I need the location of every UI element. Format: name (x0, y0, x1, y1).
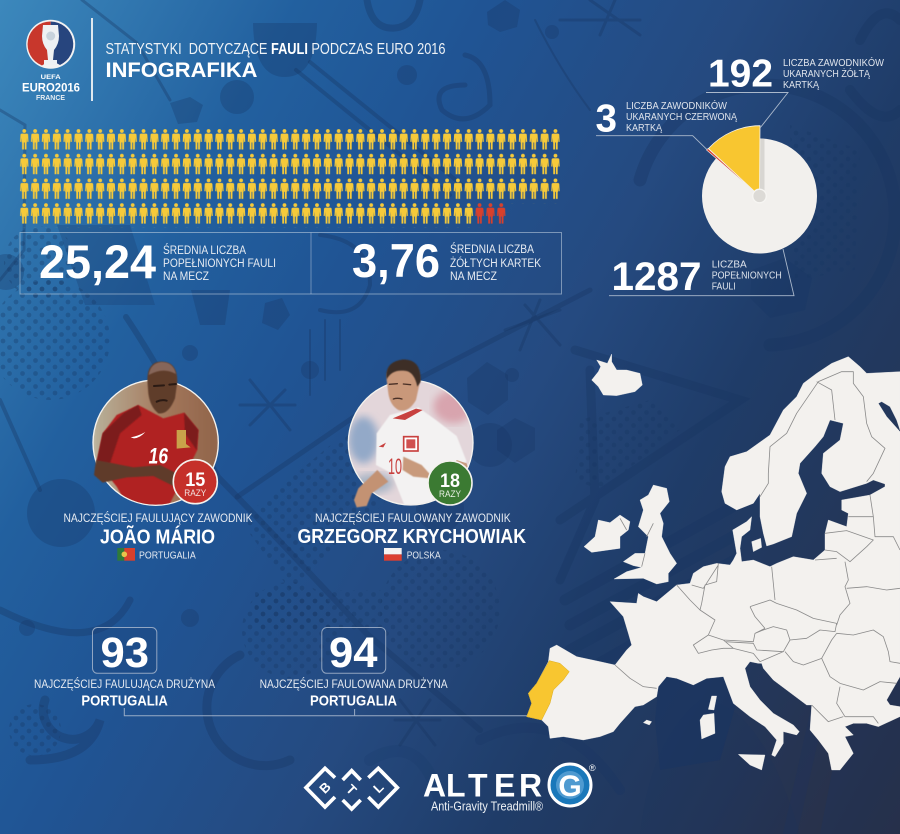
text: most fouling player (64, 510, 252, 562)
text: most fouled player: POLSKA (407, 550, 441, 562)
badge: 15 times: RAZY (184, 488, 207, 499)
logo: UEFA Euro 2016: FRANCE (36, 95, 65, 102)
pie chart (702, 126, 817, 254)
text: most fouled player (298, 510, 526, 562)
callout: 3 red cards: UKARANYCH CZERWONĄ (626, 111, 738, 123)
wedge: yellow cards (708, 126, 760, 196)
title: INFOGRAFIKA (106, 57, 258, 82)
flag: Portugal (117, 548, 135, 561)
country borders (615, 372, 900, 723)
panel: average stats (20, 232, 562, 294)
land masses (527, 354, 900, 770)
stat: yellow cards per match: ŚREDNIA LICZBA (450, 243, 534, 256)
team stat: most fouling team: NAJCZĘŚCIEJ FAULUJĄCA DRUŻYNA (34, 678, 215, 691)
title (106, 41, 446, 82)
player portrait: Grzegorz Krychowiak (347, 359, 477, 507)
map of Europe (527, 354, 900, 770)
player portrait: João Mário (90, 362, 223, 510)
callout: 192 yellow cards: UKARANYCH ŻÓŁTĄ (783, 67, 871, 80)
text: most fouling player: JOÃO MÁRIO (100, 526, 215, 548)
logo: UEFA Euro 2016 (22, 20, 80, 102)
background dot patterns (0, 125, 860, 756)
callout: 1287 fouls: 1287 (612, 255, 702, 299)
logo: AlterG (423, 763, 596, 814)
player portrait: Grzegorz Krychowiak: 10 (388, 454, 402, 479)
connector line to Portugal (124, 708, 527, 716)
badge: 18 times: RAZY (439, 489, 462, 500)
pictogram chart: 195 players (19, 129, 561, 228)
callout: 3 red cards: LICZBA ZAWODNIKÓW (626, 99, 727, 112)
callout: 1287 fouls: LICZBA (712, 258, 747, 270)
text: most fouled player: NAJCZĘŚCIEJ FAULOWANY ZAWODNIK (315, 510, 511, 525)
team stat: most fouling team: 93 (100, 629, 149, 677)
text: most fouling player: PORTUGALIA (139, 550, 196, 562)
stat: fouls per match: POPEŁNIONYCH FAULI (163, 258, 276, 270)
team stat: most fouled team: NAJCZĘŚCIEJ FAULOWANA DRUŻYNA (260, 678, 448, 691)
stat: yellow cards per match: ŻÓŁTYCH KARTEK (450, 257, 541, 270)
callout: 3 red cards (596, 98, 738, 149)
text: most fouled player: GRZEGORZ KRYCHOWIAK (298, 526, 526, 548)
logo: AlterG: Anti-Gravity Treadmill® (431, 799, 543, 814)
stat: fouls per match: ŚREDNIA LICZBA (163, 244, 246, 257)
title: STATYSTYKI DOTYCZĄCE FAULI PODCZAS EURO 2016 (106, 41, 446, 58)
badge: 18 times: 18 (440, 471, 460, 492)
badge: 15 times (173, 460, 217, 504)
team stat: most fouled team: PORTUGALIA (310, 692, 397, 710)
text: most fouling player: NAJCZĘŚCIEJ FAULUJĄCY ZAWODNIK (64, 510, 252, 525)
callout: 192 yellow cards: KARTKĄ (783, 79, 820, 91)
callout: 192 yellow cards: LICZBA ZAWODNIKÓW (783, 56, 884, 69)
highlighted country: Portugal (527, 661, 569, 720)
logo: BTL: L (370, 780, 387, 796)
logo: UEFA Euro 2016: UEFA (41, 75, 62, 81)
icon: G badge: ® (589, 763, 596, 773)
stat: fouls per match: NA MECZ (163, 271, 209, 283)
stat: fouls per match: 25,24 (39, 235, 156, 288)
callout: 1287 fouls: POPEŁNIONYCH (712, 270, 782, 282)
wedge: red cards (706, 148, 760, 196)
icon: G badge (549, 763, 596, 806)
logo: BTL: T (343, 781, 359, 798)
stat: fouls per match (39, 235, 276, 288)
logo: AlterG: ALTER (423, 768, 542, 804)
logo: UEFA Euro 2016: EURO2016 (22, 81, 80, 95)
player portrait: João Mário: 16 (149, 443, 169, 468)
team stat: most fouling team (34, 628, 215, 710)
flag: Poland (384, 548, 402, 561)
stat: yellow cards per match: NA MECZ (450, 271, 497, 283)
badge: 18 times (428, 461, 472, 505)
logo: BTL (306, 768, 397, 809)
stat: yellow cards per match (352, 234, 541, 287)
stat: yellow cards per match: 3,76 (352, 234, 440, 287)
callout: 1287 fouls (609, 249, 794, 299)
callout: 192 yellow cards (706, 52, 884, 128)
callout: 192 yellow cards: 192 (708, 52, 773, 96)
logo: BTL: B (316, 779, 334, 796)
callout: 3 red cards: 3 (596, 98, 617, 141)
badge: 15 times: 15 (185, 470, 206, 491)
team stat: most fouling team: PORTUGALIA (81, 692, 168, 710)
team stat: most fouled team (260, 628, 448, 710)
team stat: most fouled team: 94 (329, 629, 378, 677)
callout: 3 red cards: KARTKĄ (626, 122, 663, 134)
callout: 1287 fouls: FAULI (712, 280, 736, 292)
icon: G badge: G (558, 770, 582, 803)
header divider (91, 18, 93, 101)
